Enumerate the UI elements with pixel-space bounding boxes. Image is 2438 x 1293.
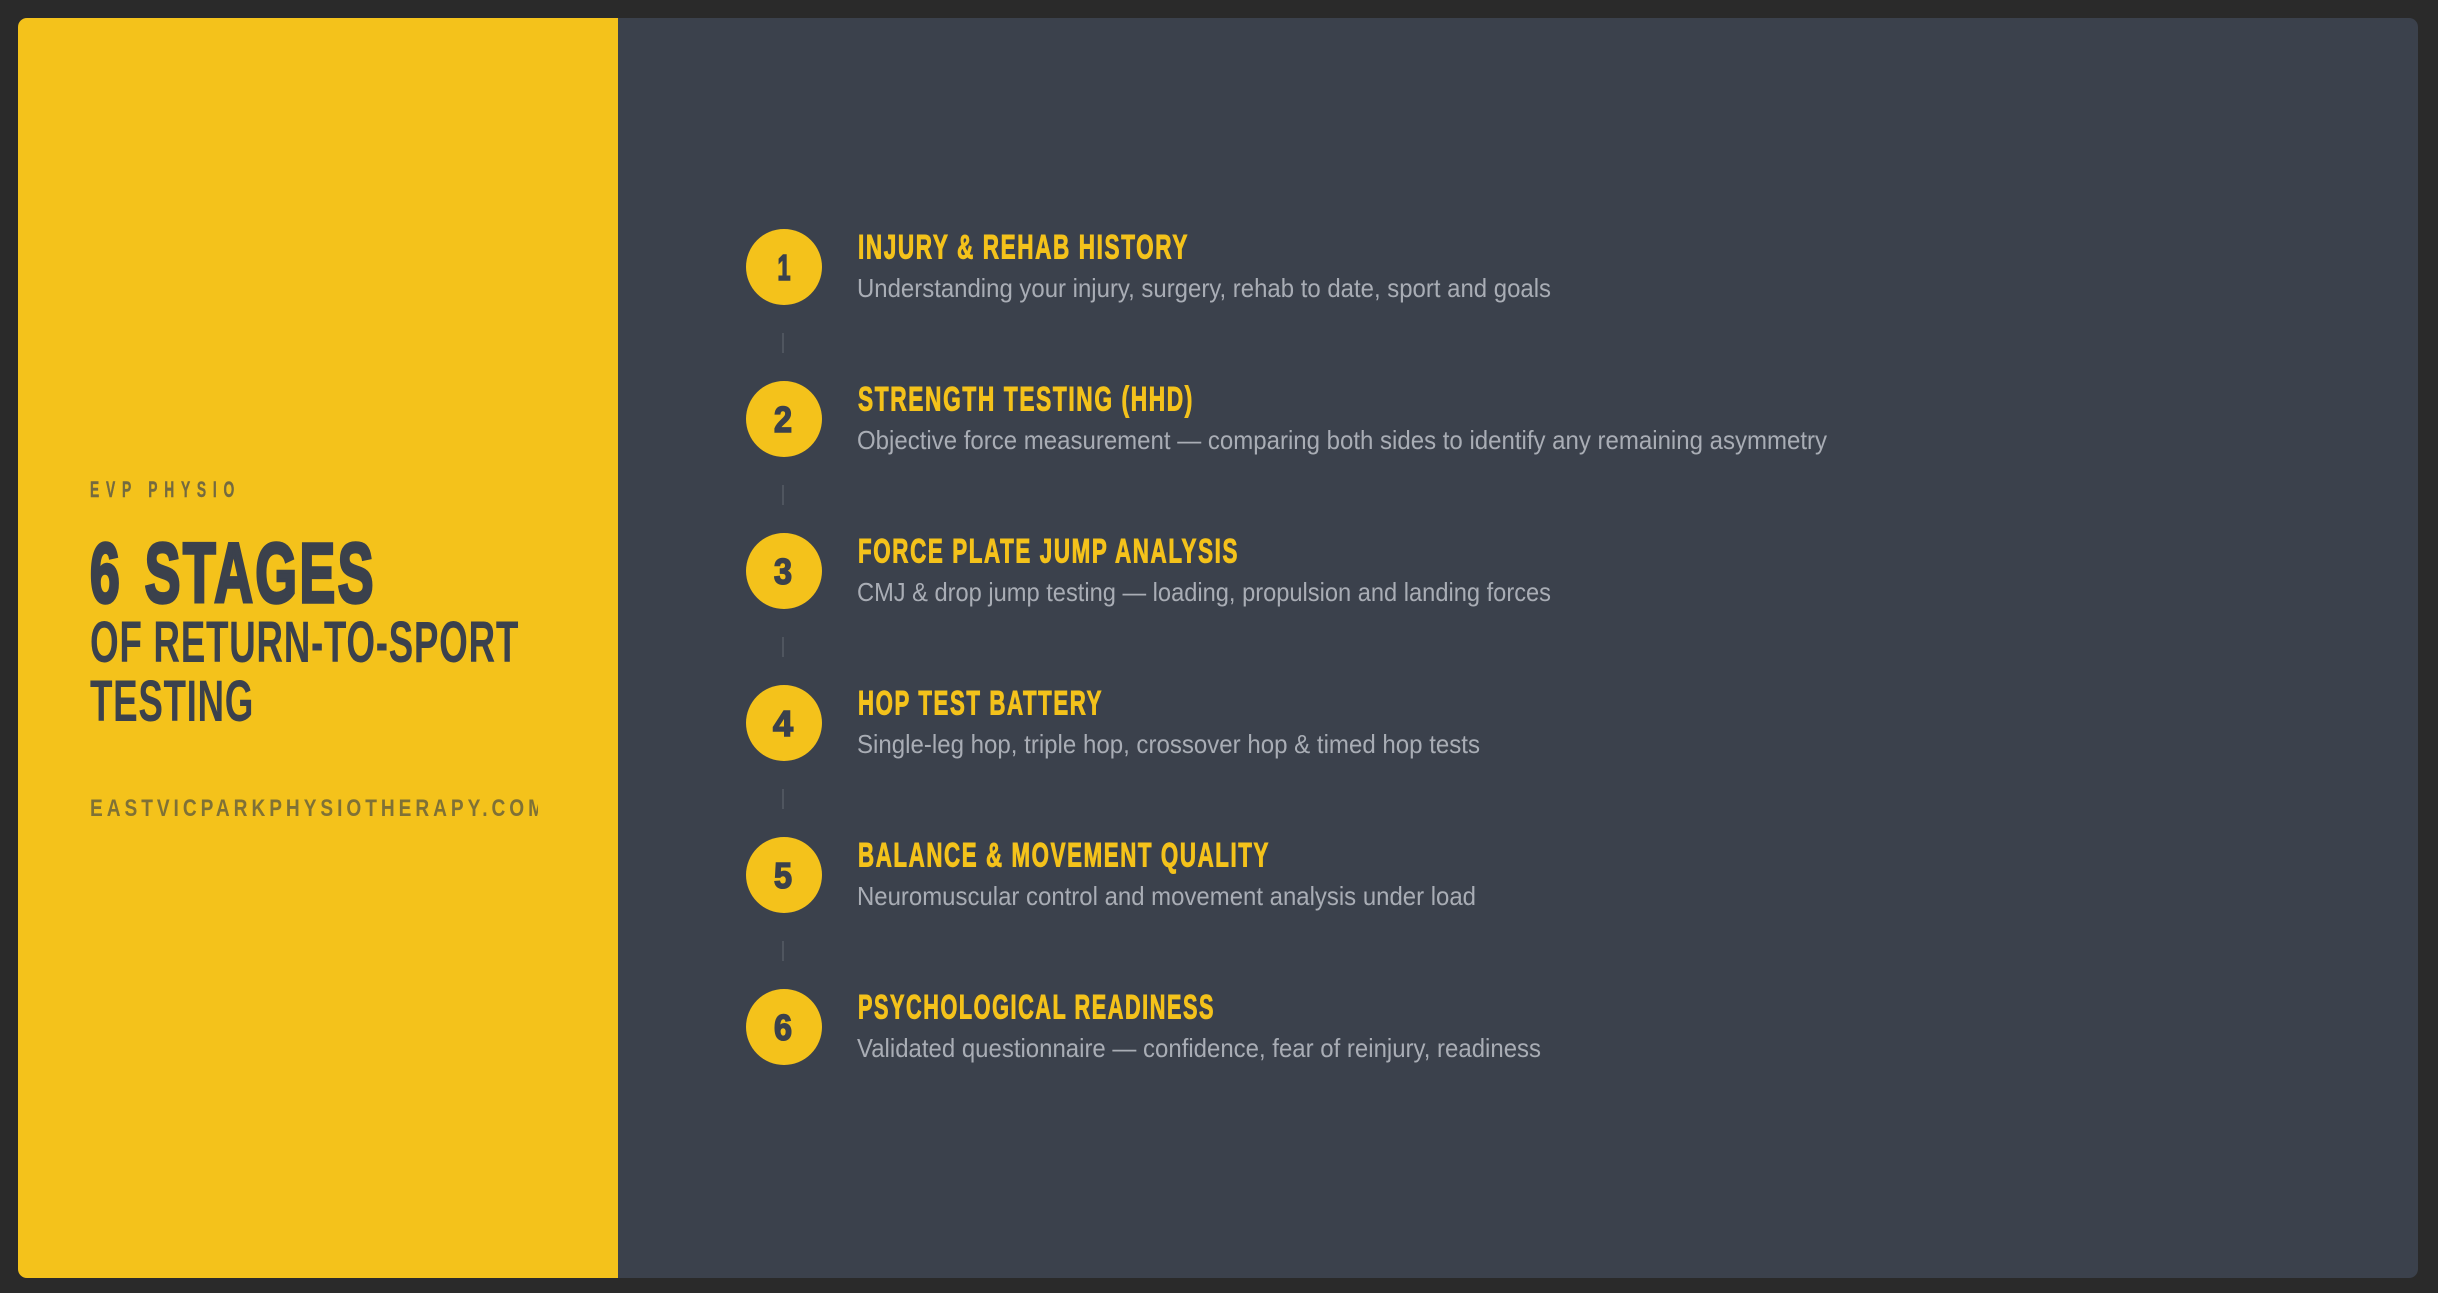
website url: EASTVICPARKPHYSIOTHERAPY.COM (90, 795, 548, 822)
brand label: EVP PHYSIO (90, 477, 241, 502)
step 2 (746, 380, 1827, 457)
step 6: 6 (774, 1007, 792, 1048)
connector 2 to 3 (782, 485, 784, 505)
step 3: FORCE PLATE JUMP ANALYSIS (858, 532, 1239, 570)
step 2: 2 (774, 399, 792, 440)
step 6 (746, 988, 1541, 1065)
step 3 (746, 532, 1551, 609)
step 6: Validated questionnaire — confidence, fear of reinjury, readiness (857, 1033, 1541, 1063)
step 4 (746, 684, 1480, 761)
title: OF RETURN-TO-SPORT (90, 610, 519, 675)
step 3: 3 (774, 551, 792, 592)
step 1 (746, 228, 1551, 305)
step 2: STRENGTH TESTING (HHD) (858, 380, 1194, 418)
connector 5 to 6 (782, 941, 784, 961)
connector 1 to 2 (782, 333, 784, 353)
step 6: PSYCHOLOGICAL READINESS (858, 988, 1215, 1026)
step 1: Understanding your injury, surgery, rehab to date, sport and goals (857, 273, 1551, 303)
step 5: Neuromuscular control and movement analysis under load (857, 881, 1476, 911)
connector 3 to 4 (782, 637, 784, 657)
step 5: 5 (774, 855, 792, 896)
title: TESTING (90, 669, 254, 734)
panel: dark content background (618, 18, 2418, 1278)
step 2: Objective force measurement — comparing both sides to identify any remaining asymmetry (857, 425, 1827, 455)
step 5 (746, 836, 1476, 913)
step 5: BALANCE & MOVEMENT QUALITY (858, 836, 1270, 874)
step 4: HOP TEST BATTERY (858, 684, 1103, 722)
step 4: 4 (773, 703, 793, 744)
step 1: 1 (778, 247, 790, 288)
panel: yellow title sidebar (18, 18, 618, 1278)
connector 4 to 5 (782, 789, 784, 809)
step 4: Single-leg hop, triple hop, crossover hop & timed hop tests (857, 729, 1480, 759)
title (90, 526, 519, 734)
step 1: INJURY & REHAB HISTORY (858, 228, 1189, 266)
step 3: CMJ & drop jump testing — loading, propulsion and landing forces (857, 577, 1551, 607)
title: 6 STAGES (90, 526, 376, 620)
